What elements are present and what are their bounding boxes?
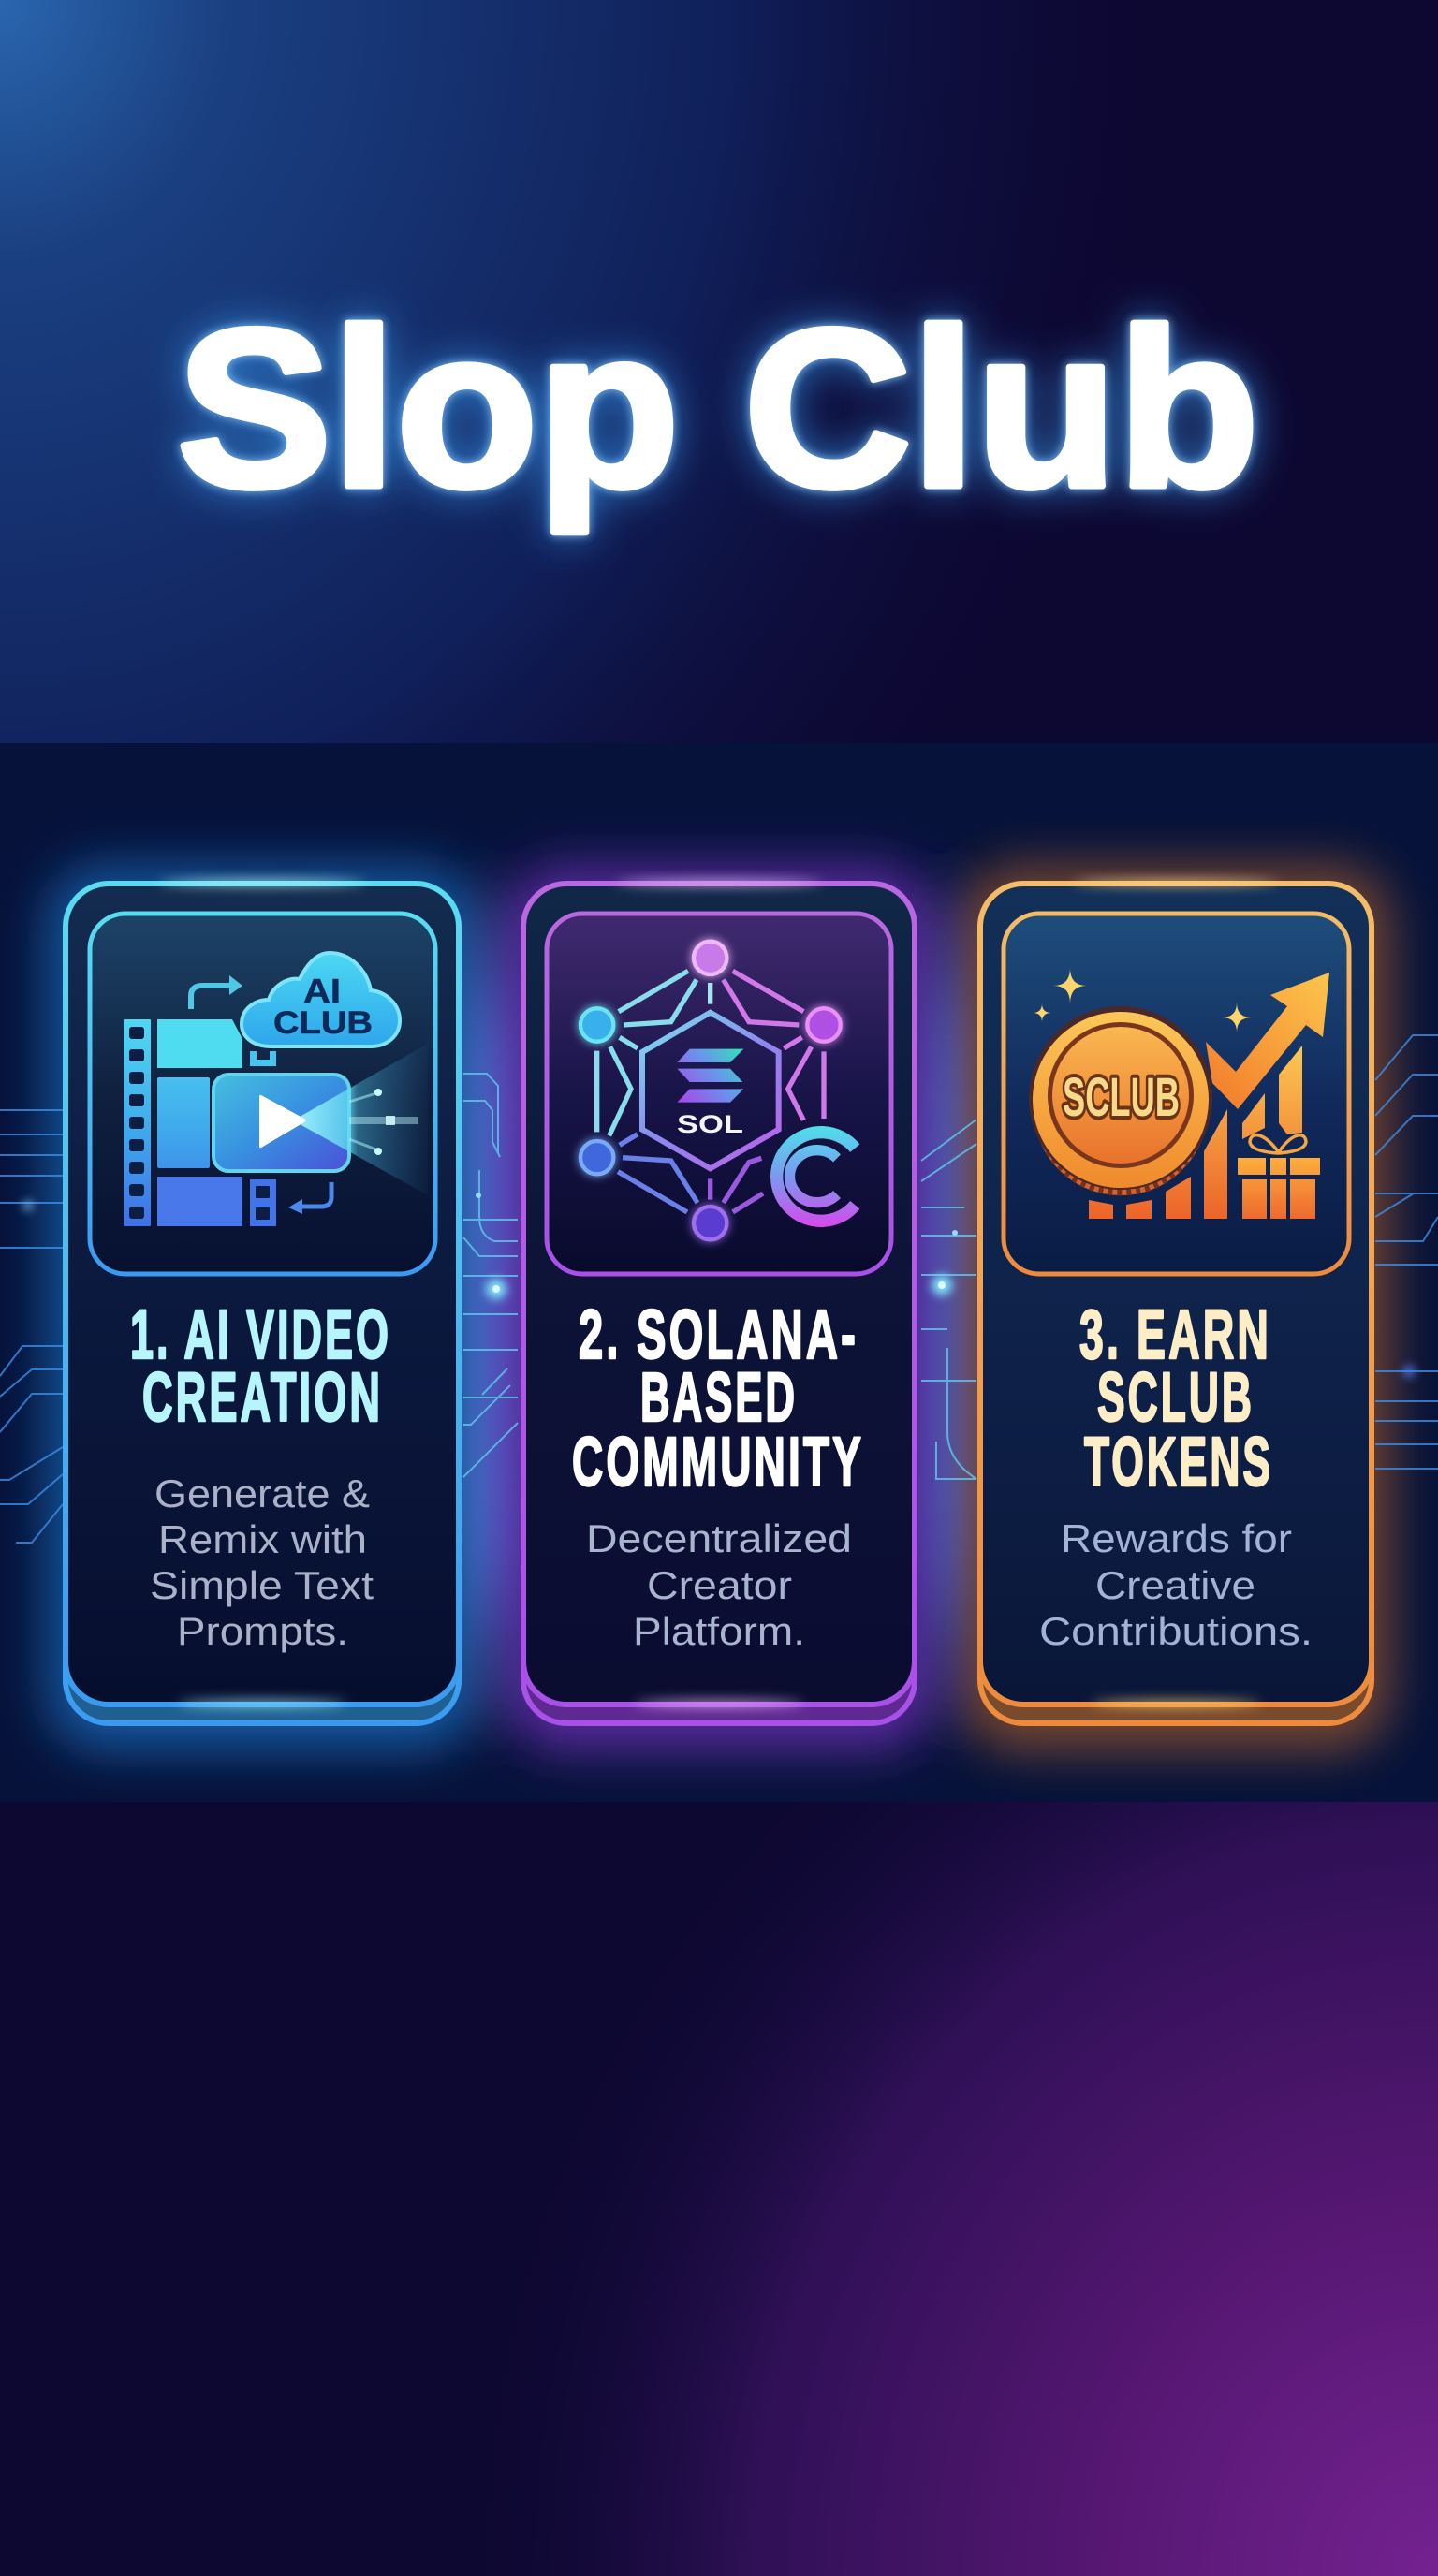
glow behind cards	[47, 866, 1390, 1750]
bottom light	[178, 1701, 346, 1706]
description	[586, 1516, 852, 1653]
icon: loop arrow top	[191, 975, 242, 1009]
Solana label: SOL	[677, 1110, 743, 1138]
coin label: SCLUB	[1063, 1067, 1180, 1128]
cloud label: AI	[303, 972, 341, 1010]
description	[150, 1471, 374, 1653]
description: Decentralized	[586, 1516, 852, 1560]
icon panel	[90, 914, 435, 1274]
description	[1039, 1516, 1313, 1653]
gap glow between cards	[459, 973, 979, 1629]
heading: SCLUB	[1097, 1358, 1255, 1436]
icon: Solana network	[580, 942, 855, 1239]
description: Generate &	[154, 1471, 370, 1515]
heading: COMMUNITY	[572, 1423, 864, 1500]
description: Rewards for	[1061, 1516, 1292, 1560]
top light	[616, 880, 822, 886]
top light	[1073, 880, 1279, 886]
top light	[159, 880, 365, 886]
description: Contributions.	[1039, 1609, 1313, 1653]
bottom light	[635, 1701, 803, 1706]
heading	[1079, 1295, 1273, 1500]
coin	[1029, 1006, 1212, 1195]
description: Creator	[647, 1563, 792, 1607]
icon: loop arrow bottom	[288, 1182, 331, 1214]
panel: card 1 AI video creation	[66, 880, 459, 1723]
icon: play button panel	[213, 1075, 349, 1171]
icon: C coin	[777, 1133, 855, 1221]
icon: projector beam	[293, 1044, 428, 1195]
icon: play triangle	[259, 1095, 305, 1148]
description: Creative	[1095, 1563, 1255, 1607]
description: Remix with	[158, 1517, 367, 1561]
heading: TOKENS	[1084, 1423, 1273, 1500]
icon: video film and AI cloud	[124, 953, 428, 1226]
gift	[1238, 1135, 1320, 1219]
heading: 3. EARN	[1079, 1295, 1271, 1373]
icon: coin, growth chart and gift	[1029, 968, 1329, 1219]
heading: 1. AI VIDEO	[130, 1295, 391, 1373]
panel: card 3 Earn SCLUB tokens	[980, 880, 1372, 1723]
bottom light	[1092, 1701, 1260, 1706]
glowing nodes	[23, 1193, 1415, 1377]
icon: cloud	[242, 953, 400, 1046]
nodes	[580, 942, 841, 1239]
circuit lines	[0, 1035, 1438, 1543]
heading: 2. SOLANA-	[579, 1295, 858, 1373]
heading: BASED	[640, 1358, 798, 1436]
icon panel	[547, 914, 891, 1274]
bars	[1089, 1046, 1302, 1219]
heading	[130, 1295, 391, 1436]
cloud label: CLUB	[273, 1005, 373, 1041]
hexagon	[642, 1013, 779, 1168]
heading: CREATION	[142, 1358, 383, 1436]
network lines	[597, 971, 824, 1212]
cloud label	[273, 972, 373, 1041]
description: Simple Text	[150, 1563, 374, 1607]
growth arrow	[1206, 973, 1329, 1109]
sparkles	[1033, 968, 1252, 1032]
icon panel	[1004, 914, 1349, 1274]
icon: Solana mark	[677, 1049, 743, 1103]
heading	[572, 1295, 864, 1500]
icon: film strip	[124, 1019, 276, 1226]
panel: card 2 Solana-based community	[523, 880, 915, 1723]
description: Prompts.	[177, 1609, 348, 1653]
description: Platform.	[633, 1609, 805, 1653]
panel: feature band	[0, 743, 1438, 1802]
title: Slop Club	[177, 283, 1259, 534]
